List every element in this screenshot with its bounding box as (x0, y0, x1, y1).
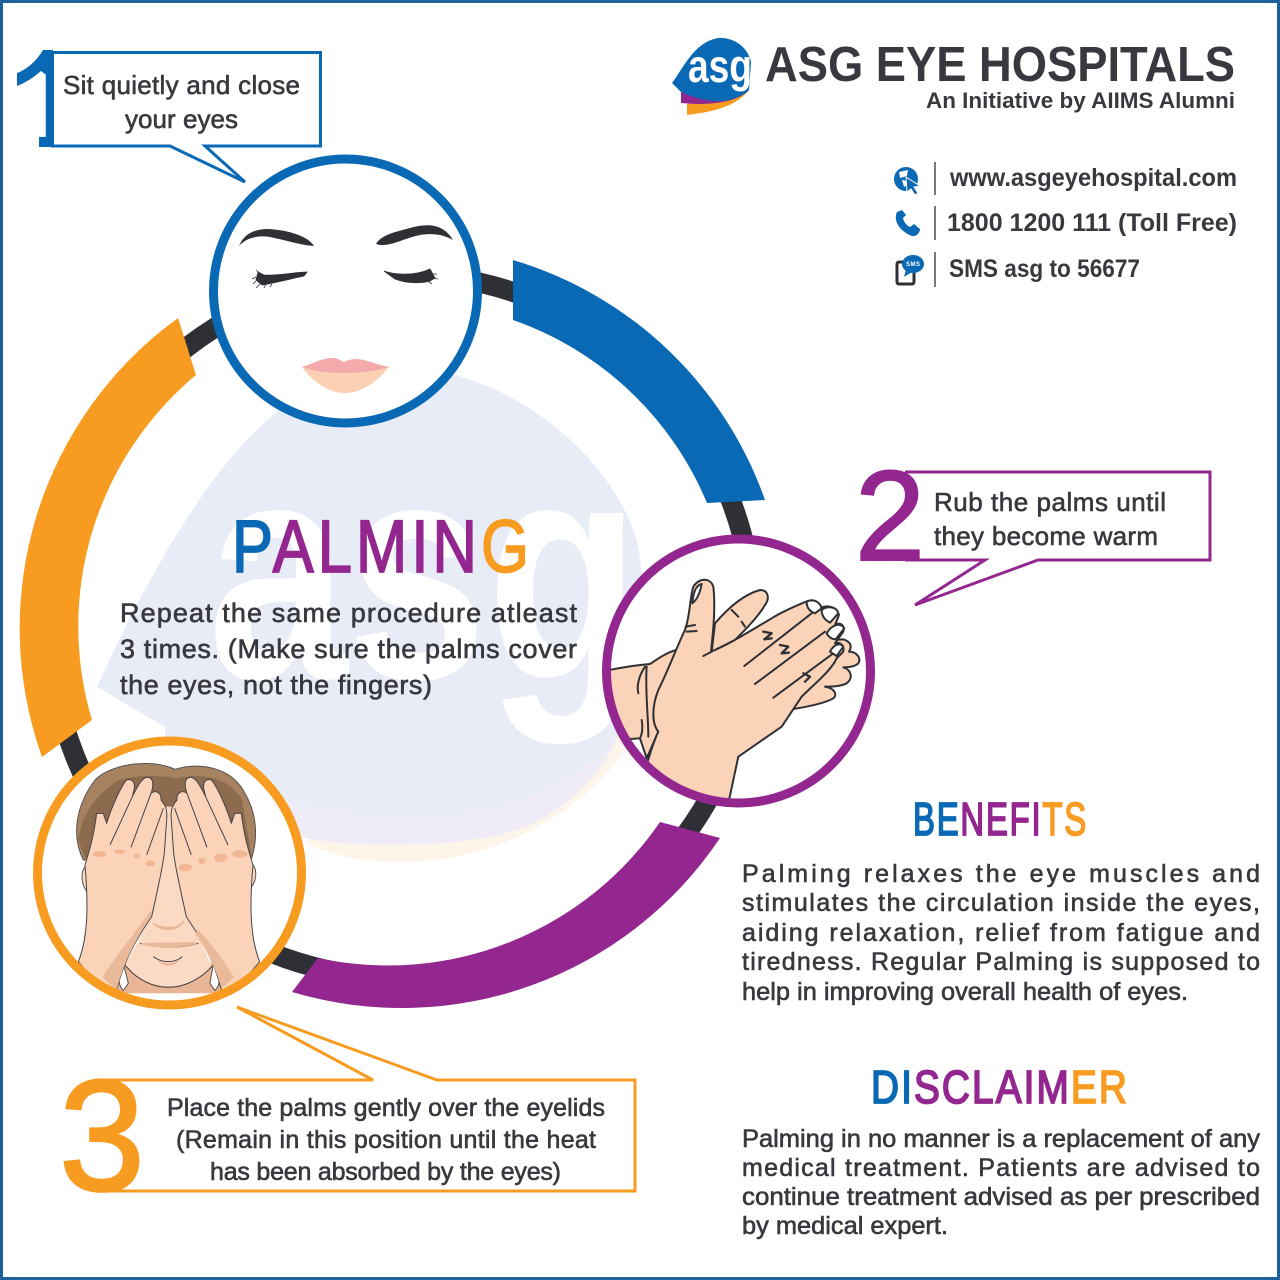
palming instructions (120, 598, 577, 700)
icon: sms phone: SMS (906, 262, 920, 268)
numeral 3: 3 (59, 1048, 145, 1224)
heading: DISCLAIMER: DISCLAIMER (871, 1061, 1129, 1113)
title: PALMING: PALMING (232, 505, 533, 588)
callout text: they become warm (934, 521, 1158, 551)
benefits text: tiredness. Regular Palming is supposed to (742, 948, 1260, 976)
callout 3 (59, 1007, 635, 1224)
step 2 circle: rubbing palms (602, 538, 872, 804)
numeral 1 (17, 50, 53, 147)
callout text: Sit quietly and close (63, 70, 300, 100)
nails (692, 584, 844, 656)
step 1 circle: closed-eye face (214, 159, 478, 423)
finger lines (638, 610, 833, 738)
benefits text: Palming relaxes the eye muscles and (742, 860, 1260, 888)
benefits text: help in improving overall health of eyes. (742, 978, 1188, 1006)
numeral 2: 2 (855, 445, 925, 588)
icon: globe (894, 167, 920, 195)
contact details (894, 162, 1237, 287)
lips (302, 358, 389, 393)
arc: purple (292, 822, 720, 1008)
disclaimer text: continue treatment advised as per prescribed (742, 1183, 1260, 1211)
callout 2 (855, 445, 1210, 605)
benefits text (742, 860, 1260, 1006)
disclaimer text: medical treatment. Patients are advised to (742, 1154, 1260, 1182)
back hand fingers (712, 590, 768, 652)
disclaimer text: Palming in no manner is a replacement of any (742, 1125, 1261, 1153)
palming instructions: Repeat the same procedure atleast (120, 598, 577, 628)
watermark: asg logo: asg (208, 397, 640, 746)
numeral 1: 1 (15, 24, 83, 176)
process ring (20, 260, 765, 1008)
hospital name (765, 38, 1235, 113)
callout text (167, 1094, 605, 1186)
callout text: your eyes (125, 104, 238, 134)
left hand (78, 777, 167, 993)
back hand (611, 649, 676, 760)
disclaimer text (742, 1125, 1261, 1240)
dividers (934, 162, 936, 287)
logo: asg (688, 40, 752, 92)
phone number: 1800 1200 111 (Toll Free) (947, 209, 1237, 237)
arc: orange (20, 318, 196, 757)
callout text: Rub the palms until (934, 487, 1166, 517)
face (125, 807, 212, 986)
watermark: asg logo (97, 370, 645, 862)
hospital name: An Initiative by AIIMS Alumni (926, 88, 1235, 113)
hospital name: ASG EYE HOSPITALS (765, 38, 1235, 92)
logo (672, 38, 752, 115)
closed eyes (252, 269, 438, 288)
callout text (934, 487, 1166, 551)
sms: SMS asg to 56677 (949, 255, 1140, 283)
arc: blue (513, 260, 765, 503)
disclaimer text: by medical expert. (742, 1212, 948, 1240)
callout text: has been absorbed by the eyes) (210, 1158, 561, 1186)
step 3 circle: palms over eyes (36, 740, 302, 1006)
knuckle marks (763, 632, 810, 682)
callout text: Place the palms gently over the eyelids (167, 1094, 605, 1122)
benefits text: stimulates the circulation inside the eyes, (742, 889, 1260, 917)
icon: phone (896, 210, 920, 236)
icon: sms phone (897, 255, 924, 284)
callout 1 (17, 50, 322, 184)
neck (117, 963, 221, 994)
right hand (171, 777, 260, 993)
heading: BENEFITS: BENEFITS (913, 793, 1088, 845)
eyebrows (239, 225, 453, 246)
ears (82, 863, 256, 893)
palming instructions: the eyes, not the fingers) (120, 670, 432, 700)
front hand (645, 580, 844, 803)
benefits text: aiding relaxation, relief from fatigue and (742, 919, 1260, 947)
palming instructions: 3 times. (Make sure the palms cover (120, 634, 577, 664)
callout text (63, 70, 300, 134)
callout text: (Remain in this position until the heat (176, 1126, 596, 1154)
website: www.asgeyehospital.com (949, 164, 1237, 192)
hair (77, 763, 256, 860)
